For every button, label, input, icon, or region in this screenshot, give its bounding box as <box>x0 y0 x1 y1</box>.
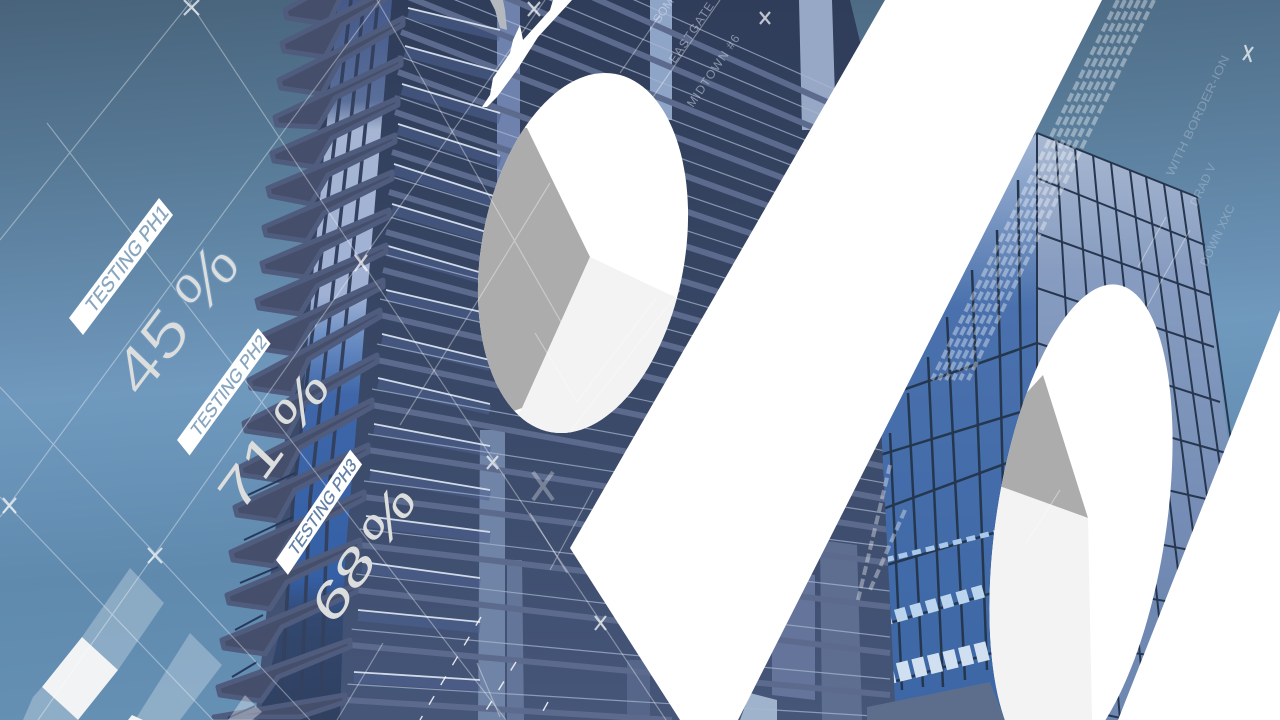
small caption: DOWN XXC: DOWN XXC <box>1197 202 1238 268</box>
left residential tower <box>214 0 895 720</box>
left bar chart <box>23 568 262 720</box>
small caption: EASTGATE: EASTGATE <box>666 0 717 66</box>
value: 71 %: 71 <box>207 421 293 522</box>
value: 68 %: 68 <box>302 532 385 635</box>
tower right face floors <box>345 0 890 720</box>
pie chart right <box>989 284 1173 720</box>
value: 68 %: % <box>351 472 425 562</box>
value: 71 %: % <box>263 357 339 446</box>
percent sign right fragment <box>1118 310 1280 720</box>
pie slice light <box>518 257 677 433</box>
top white fragment <box>482 0 572 107</box>
short dashes <box>420 617 548 720</box>
right glass tower <box>882 132 1231 720</box>
balcony rails <box>228 473 295 718</box>
small caption: DRAD V: DRAD V <box>1187 161 1219 208</box>
pie slice grey <box>1001 375 1088 518</box>
label: TESTING PH3: TESTING PH3 <box>286 454 360 560</box>
value: 45 %: 45 <box>101 294 202 410</box>
data stream <box>858 0 1154 600</box>
bar 2 <box>128 633 222 720</box>
tower glass panels <box>478 0 862 720</box>
small caption: WITH BORDER-ION: WITH BORDER-ION <box>1163 53 1232 178</box>
pie chart left <box>478 73 688 433</box>
bar 1 <box>23 568 164 720</box>
label: TESTING PH2: TESTING PH2 <box>188 330 270 441</box>
tower windows on left face <box>258 0 392 720</box>
pie slice grey <box>478 128 590 411</box>
ground block <box>867 682 1005 720</box>
balcony wedges <box>214 0 408 717</box>
value: 45 %: % <box>161 227 252 330</box>
small caption: MIDTOWN #6: MIDTOWN #6 <box>684 31 743 110</box>
percent sign slash <box>570 0 1102 720</box>
bar 3 <box>228 695 262 720</box>
pie slice light <box>989 487 1092 720</box>
label: TESTING PH1: TESTING PH1 <box>83 200 172 318</box>
